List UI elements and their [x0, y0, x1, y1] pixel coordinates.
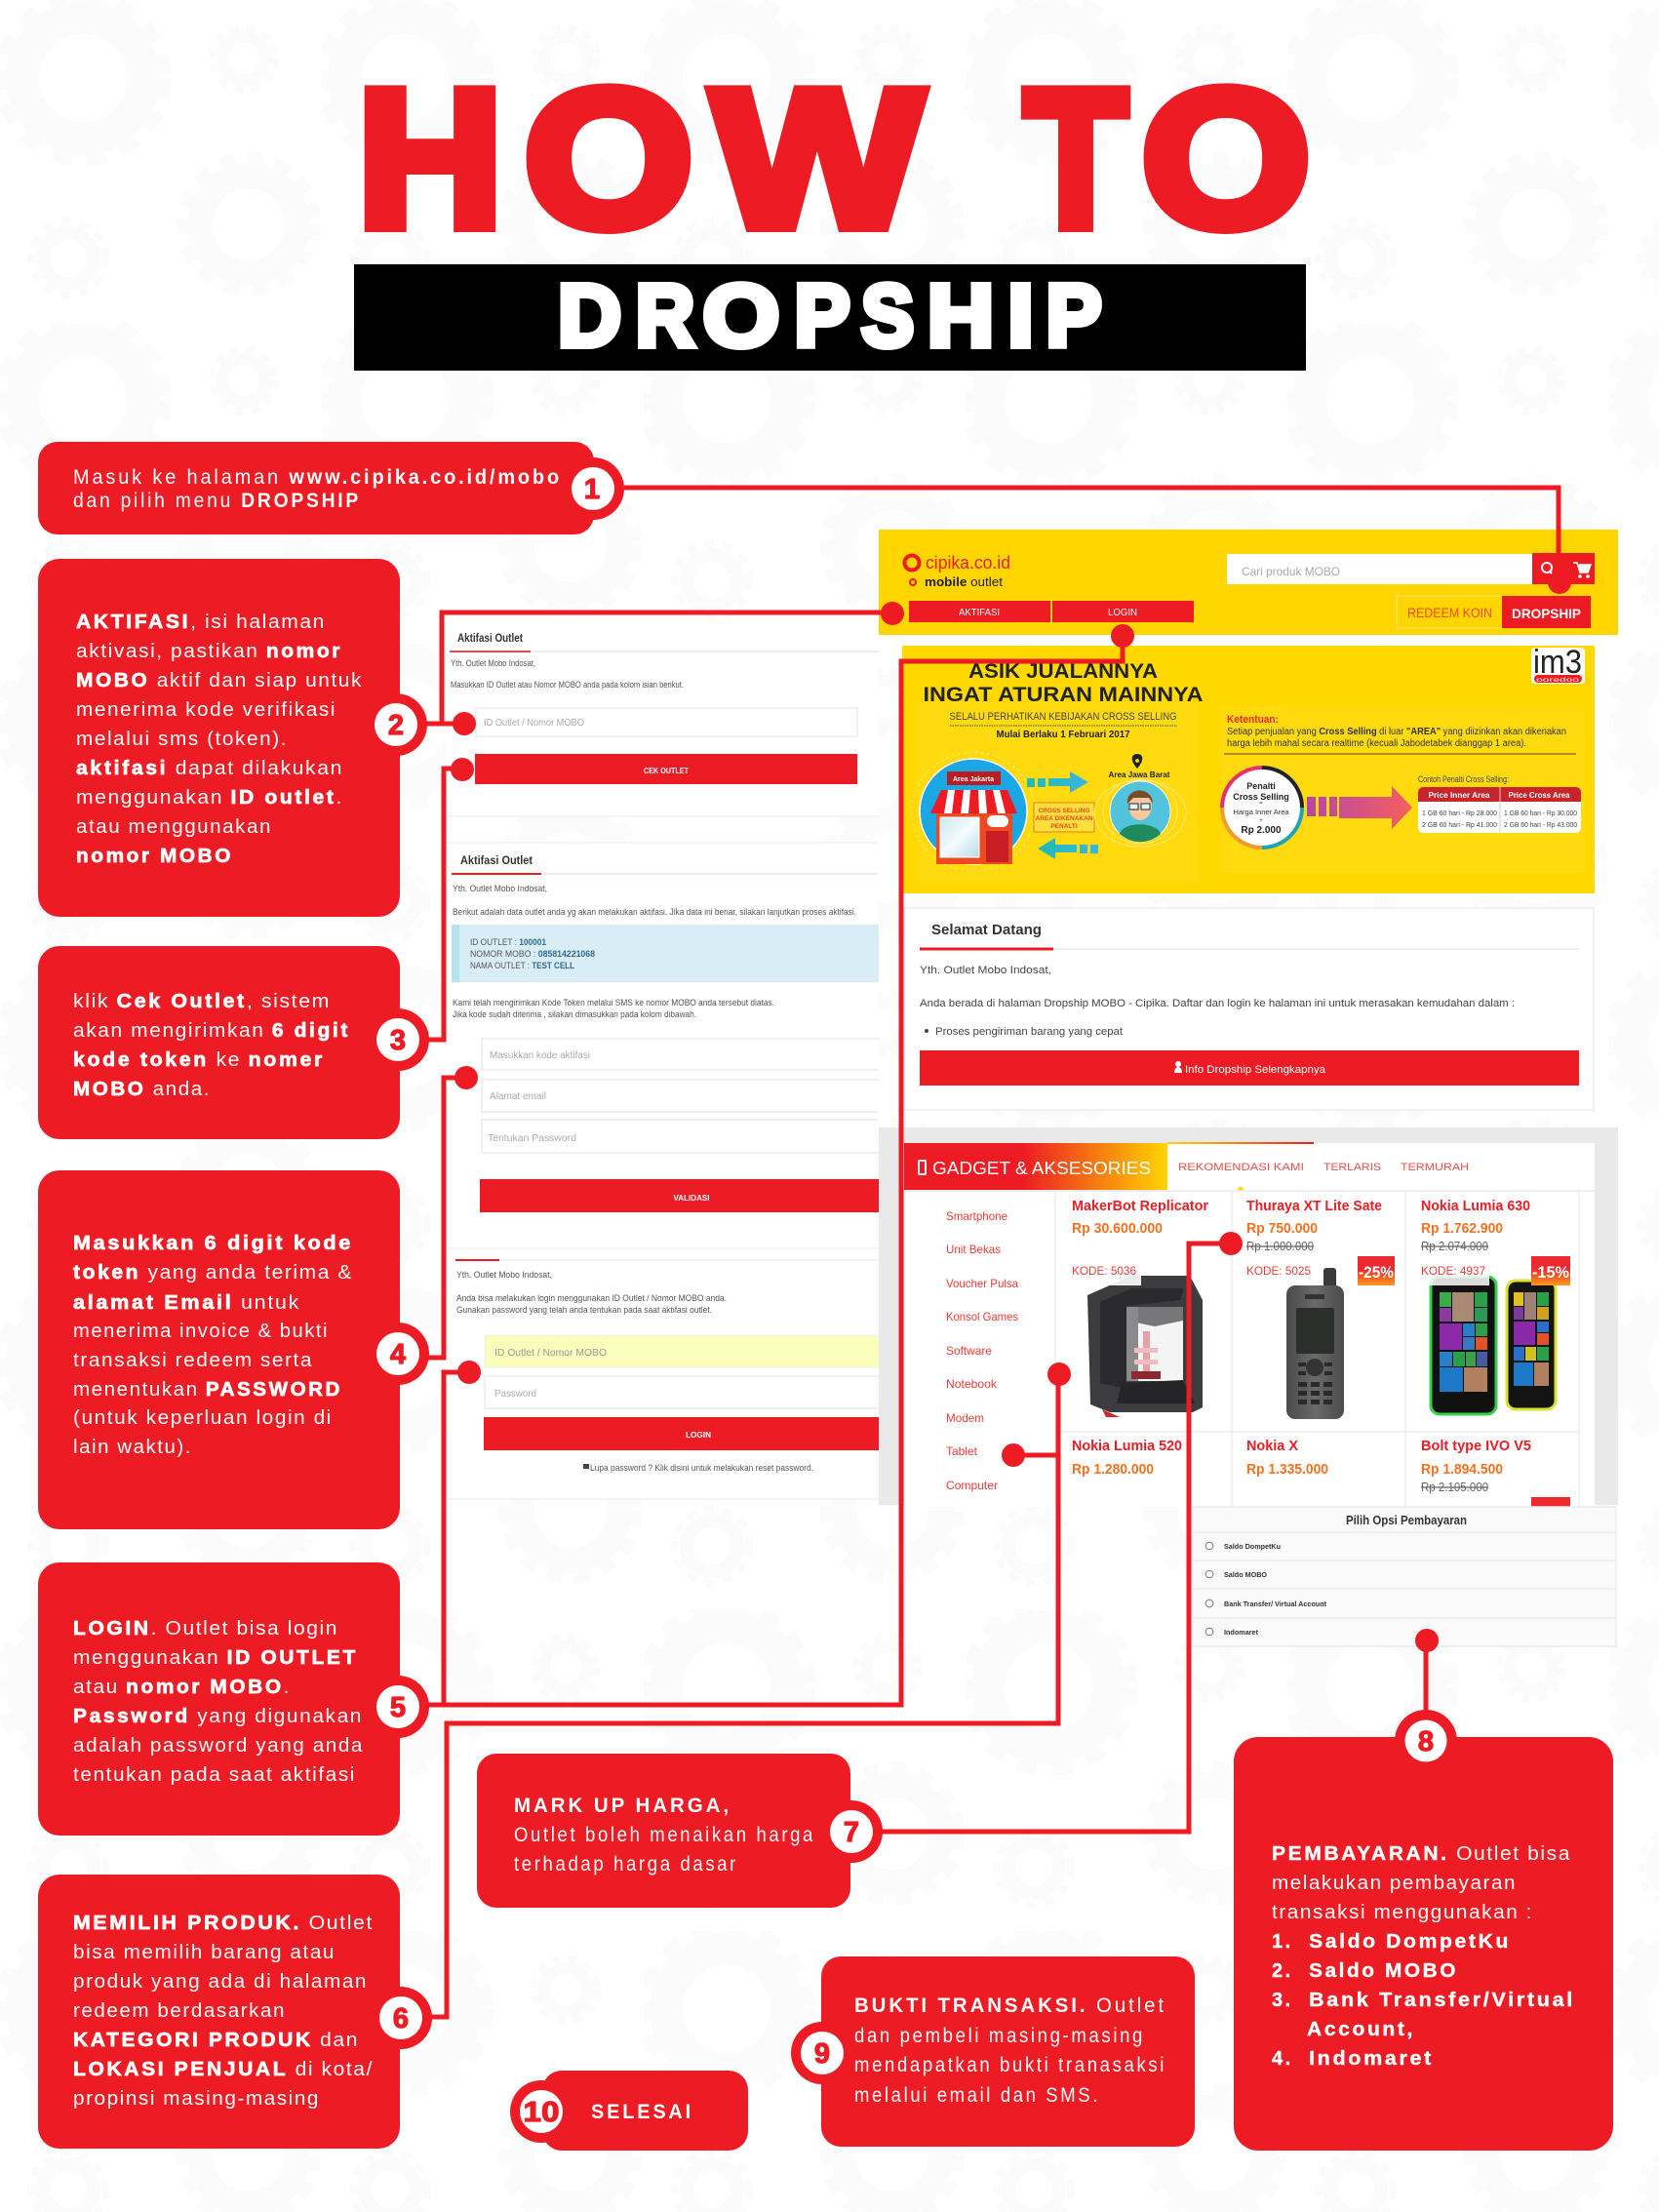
label: cross selling penalty	[1034, 803, 1094, 832]
step 7: mark up price: 7	[844, 1817, 859, 1848]
step 7: mark up price: MARK UP HARGA,	[514, 1795, 731, 1817]
step 8: payment: transaksi menggunakan :	[1272, 1902, 1533, 1923]
step 3: cek outlet: 3	[390, 1025, 406, 1056]
step 6: choose product: bisa memilih barang atau	[73, 1942, 336, 1963]
subtitle banner: DROPSHIP: R	[636, 267, 694, 365]
step 6: choose product	[38, 1875, 432, 2149]
ring: penalti cross selling: Harga Inner Area	[1233, 808, 1289, 816]
menu: product categories: Modem	[946, 1411, 984, 1425]
subtitle banner: DROPSHIP: I	[1007, 266, 1034, 365]
product: nokia x: Nokia X	[1246, 1438, 1298, 1454]
text: ketentuan rules: Ketentuan:	[1227, 714, 1279, 726]
step 8: payment: 3.	[1272, 1990, 1293, 2011]
menu: product categories	[946, 1209, 1018, 1492]
menu: aktifasi and login buttons: AKTIFASI	[959, 608, 1000, 618]
card: token validation form: Jika kode sudah diterima , silakan dimasukkan pada kolom dibawah.	[453, 1009, 696, 1019]
label: cross selling penalty: CROSS SELLING	[1038, 808, 1090, 814]
header: gadget tabs	[904, 1142, 1595, 1191]
title: HOW TO	[358, 49, 1310, 268]
panel: payment options: Saldo MOBO	[1224, 1572, 1268, 1579]
promotional banner: cross selling rules	[902, 644, 1595, 893]
step 8: payment: 1.	[1272, 1931, 1293, 1953]
card: token validation form: VALIDASI	[673, 1193, 710, 1203]
step 2: activation: atau menggunakan	[76, 816, 272, 838]
ring: penalti cross selling: Penalti	[1246, 781, 1276, 791]
header: gadget tabs: GADGET & AKSESORIES	[932, 1159, 1151, 1178]
table: price example: 2 GB 60 hari - Rp 43.000	[1504, 820, 1577, 829]
screenshot: mobile outlet site header	[879, 530, 1618, 635]
product: nokia lumia 520: Rp 1.280.000	[1072, 1461, 1154, 1478]
card: cek outlet form: Masukkan ID Outlet atau Nomor MOBO anda pada kolom isian berikut.	[451, 680, 684, 690]
banner heading: SELALU PERHATIKAN KEBIJAKAN CROSS SELLING	[950, 711, 1176, 723]
step 2: activation: AKTIFASI , isi halaman	[76, 612, 326, 633]
card: login form: Lupa password ? Klik disini untuk melakukan reset password.	[590, 1463, 813, 1473]
banner heading	[923, 660, 1204, 740]
step 1: open site: 1	[584, 474, 600, 505]
step 9: transaction proof: dan pembeli masing-masing	[854, 2025, 1145, 2047]
step 2: activation: menggunakan ID outlet .	[76, 787, 343, 809]
title: HOW TO: T	[1024, 49, 1127, 267]
text: ketentuan rules: Setiap penjualan yang Cross Selling di luar "AREA" yang diizinkan akan dikenakan	[1227, 727, 1566, 737]
header: gadget tabs: TERMURAH	[1401, 1162, 1469, 1173]
step 7: mark up price: terhadap harga dasar	[514, 1853, 738, 1876]
step 9: transaction proof: melalui email dan SMS.	[854, 2084, 1100, 2107]
arrows: cross area flow	[1027, 771, 1098, 859]
card: token validation form: Masukkan kode aktifasi	[490, 1050, 590, 1061]
panel: payment options	[1193, 1507, 1616, 1646]
card: cek outlet form: Aktifasi Outlet	[457, 631, 523, 645]
banner heading: ASIK JUALANNYA	[968, 660, 1158, 683]
card: cek outlet form: CEK OUTLET	[644, 766, 690, 775]
step 4: enter token: menentukan PASSWORD	[73, 1379, 342, 1401]
connector: step 6 to product categories	[429, 1363, 1071, 2017]
menu: product categories: Tablet	[946, 1444, 978, 1458]
step 8: payment: 8	[1418, 1726, 1434, 1758]
menu: product categories: Software	[946, 1344, 992, 1358]
step 4: enter token: (untuk keperluan login di	[73, 1407, 333, 1429]
arrow: to price table	[1307, 786, 1412, 829]
ring: penalti cross selling: =	[1259, 801, 1263, 807]
text: ketentuan rules: harga lebih mahal secara realtime (kecuali Jabodetabek dianggap 1 area).	[1227, 738, 1526, 749]
menu: aktifasi and login buttons	[909, 601, 1194, 622]
logo: im3 ooredoo: ooredoo	[1536, 678, 1580, 684]
title: HOW TO: H	[358, 50, 502, 268]
step 10: finished	[510, 2071, 748, 2151]
subtitle banner: DROPSHIP: H	[928, 266, 994, 365]
card: token validation form: Yth. Outlet Mobo Indosat,	[453, 884, 547, 893]
card: token validation form	[452, 853, 879, 1212]
panel: payment options: Pilih Opsi Pembayaran	[1346, 1514, 1467, 1527]
card: token validation form: Alamat email	[490, 1091, 546, 1102]
step 5: login: 5	[390, 1692, 406, 1723]
step 7: mark up price: Outlet boleh menaikan harga	[514, 1824, 815, 1846]
product: thuraya xt lite: KODE: 5025	[1246, 1264, 1311, 1278]
card: cek outlet form: Yth. Outlet Mobo Indosat,	[451, 658, 535, 668]
product: nokia x	[1246, 1438, 1328, 1478]
product: thuraya xt lite: Thuraya XT Lite Sate	[1246, 1198, 1382, 1214]
step 4: enter token: lain waktu).	[73, 1437, 192, 1458]
step 5: login: adalah password yang anda	[73, 1735, 364, 1757]
step 5: login: LOGIN. Outlet bisa login	[73, 1618, 338, 1639]
step 5: login: menggunakan ID OUTLET	[73, 1647, 358, 1669]
card: cek outlet form	[450, 631, 879, 784]
table: price example: 2 GB 60 hari - Rp 41.000	[1422, 820, 1497, 829]
step 1: open site: Masuk ke halaman www.cipika.co.id/mobo	[73, 466, 562, 489]
step 6: choose product: produk yang ada di halaman	[73, 1971, 368, 1993]
subtitle banner: DROPSHIP: D	[558, 267, 621, 365]
menu: redeem koin and dropship	[1397, 596, 1591, 628]
connector: step 8 to payment	[1415, 1629, 1439, 1726]
step 2: activation: melalui sms (token).	[76, 729, 288, 750]
menu: product categories: Smartphone	[946, 1209, 1007, 1223]
step 9: transaction proof	[791, 1956, 1195, 2147]
table: price example	[1418, 774, 1581, 833]
product: bolt type ivo v5	[1421, 1438, 1570, 1507]
card: login form: Yth. Outlet Mobo Indosat,	[456, 1270, 552, 1280]
title: HOW TO: O	[1142, 50, 1310, 267]
step 4: enter token: 4	[390, 1339, 406, 1370]
card: token validation form: NOMOR MOBO : 085814221068	[470, 949, 595, 959]
card: token validation form: Aktifasi Outlet	[460, 853, 533, 867]
panel: payment options: Bank Transfer/ Virtual Account	[1224, 1601, 1327, 1608]
product: nokia lumia 520	[1072, 1438, 1182, 1478]
logo: im3 ooredoo: im3	[1533, 644, 1582, 681]
step 6: choose product: propinsi masing-masing	[73, 2088, 320, 2110]
search box: Cari produk MOBO	[1242, 565, 1340, 578]
panel: selamat datang welcome card	[904, 908, 1594, 1110]
step 8: payment: Saldo DompetKu	[1309, 1931, 1511, 1953]
card: token validation form: ID OUTLET : 100001	[470, 937, 546, 947]
product: thuraya xt lite: -25%	[1359, 1263, 1394, 1282]
step 2: activation: MOBO aktif dan siap untuk	[76, 670, 363, 691]
ring: penalti cross selling: Cross Selling	[1233, 792, 1289, 802]
card: login form: Anda bisa melakukan login menggunakan ID Outlet / Nomor MOBO anda.	[456, 1293, 727, 1303]
product: nokia lumia 630	[1416, 1198, 1570, 1414]
ring: penalti cross selling: +	[1259, 818, 1263, 824]
banner heading: INGAT ATURAN MAINNYA	[923, 684, 1204, 706]
step 4: enter token: transaksi redeem serta	[73, 1350, 313, 1371]
step 1: open site	[38, 442, 624, 534]
step 3: cek outlet: MOBO anda.	[73, 1079, 211, 1100]
step 9: transaction proof: mendapatkan bukti tranasaksi	[854, 2054, 1166, 2076]
menu: product categories: Voucher Pulsa	[946, 1277, 1018, 1290]
step 5: login: atau nomor MOBO .	[73, 1677, 291, 1698]
product: nokia lumia 630: Nokia Lumia 630	[1421, 1198, 1530, 1214]
card: token validation form: NAMA OUTLET : TEST CELL	[470, 961, 574, 970]
logo: cipika mobile outlet: cipika.co.id	[926, 553, 1010, 573]
product: nokia lumia 630: Rp 1.762.900	[1421, 1220, 1503, 1237]
step 8: payment: Bank Transfer/Virtual	[1309, 1990, 1575, 2011]
step 8: payment: melakukan pembayaran	[1272, 1873, 1517, 1894]
card: token validation form: Kami telah mengirimkan Kode Token melalui SMS ke nomor MOBO anda tersebut diatas.	[453, 998, 774, 1007]
step 6: choose product: redeem berdasarkan	[73, 2000, 286, 2022]
step 6: choose product: LOKASI PENJUAL di kota/	[73, 2059, 374, 2080]
text: ketentuan rules	[1224, 714, 1576, 754]
panel: selamat datang welcome card: Anda berada di halaman Dropship MOBO - Cipika. Daftar dan login ke halaman ini untuk merasakan kemudahan dalam :	[920, 998, 1515, 1009]
step 2: activation: aktivasi, pastikan nomor	[76, 641, 342, 662]
step 5: login: tentukan pada saat aktifasi	[73, 1764, 356, 1786]
header: gadget tabs: TERLARIS	[1323, 1162, 1381, 1173]
menu: aktifasi and login buttons: LOGIN	[1108, 608, 1137, 618]
step 5: login	[38, 1562, 429, 1836]
card: login form: Password	[494, 1389, 536, 1400]
header: gadget tabs: REKOMENDASI KAMI	[1178, 1162, 1304, 1173]
illustration: customer in west java: Area Jawa Barat	[1108, 770, 1170, 779]
step 10: finished: 10	[523, 2097, 560, 2128]
menu: redeem koin and dropship: REDEEM KOIN	[1407, 605, 1492, 620]
step 8: payment: PEMBAYARAN. Outlet bisa	[1272, 1843, 1571, 1865]
step 7: mark up price	[477, 1754, 883, 1908]
product: makerbot replicator: KODE: 5036	[1072, 1264, 1136, 1278]
product: bolt type ivo v5: Rp 1.894.500	[1421, 1461, 1503, 1478]
subtitle banner: DROPSHIP: P	[1046, 267, 1102, 365]
product: nokia x: Rp 1.335.000	[1246, 1461, 1328, 1478]
panel: selamat datang welcome card: Selamat Datang	[931, 922, 1042, 938]
connector lines and target dots	[426, 488, 1571, 2017]
illustration: shop	[912, 752, 1035, 871]
title: HOW TO: O	[525, 50, 692, 267]
step 3: cek outlet: akan mengirimkan 6 digit	[73, 1020, 350, 1042]
step 3: cek outlet	[38, 946, 429, 1139]
menu: redeem koin and dropship: DROPSHIP	[1512, 606, 1581, 621]
connector: step 2 to activation	[426, 602, 904, 735]
step 1: open site: dan pilih menu DROPSHIP	[73, 490, 361, 512]
menu: product categories: Konsol Games	[946, 1310, 1018, 1323]
product: nokia lumia 630: -15%	[1532, 1263, 1569, 1282]
step 5: login: Password yang digunakan	[73, 1706, 363, 1727]
step 4: enter token: Masukkan 6 digit kode	[73, 1233, 353, 1254]
ring: penalti cross selling	[1222, 768, 1302, 848]
step 6: choose product: KATEGORI PRODUK dan	[73, 2030, 359, 2051]
step 8: payment	[1234, 1710, 1613, 2151]
connector: step 4 to token form	[426, 1066, 478, 1358]
illustration: shop: Area Jakarta	[953, 776, 994, 783]
title: HOW TO: W	[712, 51, 923, 267]
subtitle banner: DROPSHIP: P	[794, 267, 850, 365]
panel: gadget and accessories products	[879, 1127, 1618, 1507]
table: price example: Price Cross Area	[1508, 790, 1570, 800]
banner heading: Mulai Berlaku 1 Februari 2017	[997, 730, 1130, 740]
screenshot: activation and login pages	[446, 624, 879, 1499]
menu: product categories: Notebook	[946, 1377, 998, 1391]
product: thuraya xt lite: Rp 750.000	[1246, 1220, 1318, 1237]
subtitle banner: DROPSHIP	[354, 264, 1306, 371]
step 4: enter token: token yang anda terima &	[73, 1262, 353, 1284]
step 4: enter token: menerima invoice & bukti	[73, 1321, 329, 1342]
connector: step 7 to price	[878, 1232, 1243, 1832]
table: price example: Contoh Penalti Cross Selling:	[1418, 774, 1509, 784]
step 2: activation: 2	[388, 710, 404, 741]
card: cek outlet form: ID Outlet / Nomor MOBO	[484, 718, 584, 729]
panel: selamat datang welcome card: Info Dropship Selengkapnya	[1185, 1064, 1326, 1076]
step 4: enter token	[38, 1170, 429, 1529]
connector: step 3 to cek outlet	[426, 758, 474, 1040]
product: nokia lumia 630: KODE: 4937	[1421, 1264, 1485, 1278]
subtitle banner: DROPSHIP: O	[703, 267, 779, 365]
table: price example: 1 GB 60 hari - Rp 30.000	[1504, 809, 1577, 817]
step 2: activation: menerima kode verifikasi	[76, 699, 336, 721]
card: login form: Gunakan password yang telah anda tentukan pada saat aktifasi outlet.	[456, 1305, 712, 1315]
step 8: payment: Account,	[1307, 2019, 1415, 2040]
panel: payment options: Indomaret	[1224, 1630, 1259, 1637]
product: bolt type ivo v5: Bolt type IVO V5	[1421, 1438, 1531, 1454]
table: price example: 1 GB 60 hari - Rp 28.000	[1422, 809, 1497, 817]
menu: product categories: Computer	[946, 1479, 998, 1492]
product: makerbot replicator: Rp 30.600.000	[1072, 1220, 1163, 1237]
step 8: payment: 2.	[1272, 1960, 1293, 1982]
card: login form	[455, 1260, 879, 1473]
step 3: cek outlet: kode token ke nomer	[73, 1049, 325, 1071]
step 10: finished: SELESAI	[591, 2101, 693, 2123]
product: thuraya xt lite: Rp 1.000.000	[1246, 1239, 1314, 1253]
step 2: activation: aktifasi dapat dilakukan	[76, 758, 343, 779]
panel: selamat datang welcome card: Yth. Outlet Mobo Indosat,	[920, 965, 1051, 976]
logo: cipika mobile outlet: mobile outlet	[925, 574, 1003, 589]
subtitle banner: DROPSHIP: S	[861, 267, 914, 365]
logo: cipika mobile outlet	[905, 553, 1010, 589]
step 2: activation: nomor MOBO	[76, 846, 233, 867]
step 3: cek outlet: klik Cek Outlet , sistem	[73, 991, 331, 1012]
label: cross selling penalty: AREA DIKENAKAN	[1036, 815, 1093, 822]
step 6: choose product: MEMILIH PRODUK. Outlet	[73, 1913, 374, 1934]
step 4: enter token: alamat Email untuk	[73, 1292, 300, 1314]
illustration: customer in west java	[1094, 754, 1186, 847]
step 8: payment: 4.	[1272, 2048, 1293, 2070]
menu: product categories: Unit Bekas	[946, 1243, 1001, 1256]
panel: selamat datang welcome card: Proses pengiriman barang yang cepat	[935, 1026, 1123, 1038]
step 8: payment: Saldo MOBO	[1309, 1960, 1458, 1982]
ring: penalti cross selling: Rp 2.000	[1241, 825, 1282, 836]
connector: step 1 to dropship menu	[624, 488, 1571, 594]
table: price example: Price Inner Area	[1428, 790, 1490, 800]
connector: step 5 to login	[426, 624, 1134, 1705]
search box	[1227, 553, 1595, 584]
step 2: activation	[38, 559, 427, 917]
card: login form: ID Outlet / Nomor MOBO	[494, 1348, 607, 1359]
product: nokia lumia 630: Rp 2.074.000	[1421, 1239, 1488, 1253]
card: token validation form: Berikut adalah data outlet anda yg akan melakukan aktifasi. Jika data ini benar, silakan lanjutkan proses aktifasi.	[453, 907, 856, 917]
card: login form: LOGIN	[686, 1430, 711, 1440]
product: makerbot replicator	[1066, 1198, 1208, 1417]
product: bolt type ivo v5: Rp 2.105.000	[1421, 1480, 1488, 1494]
step 9: transaction proof: 9	[814, 2038, 830, 2070]
panel: payment options: Saldo DompetKu	[1224, 1544, 1281, 1551]
step 8: payment: Indomaret	[1309, 2048, 1434, 2070]
label: cross selling penalty: PENALTI	[1050, 823, 1078, 830]
product: thuraya xt lite	[1242, 1198, 1395, 1419]
product: nokia lumia 520: Nokia Lumia 520	[1072, 1438, 1182, 1454]
product: makerbot replicator: MakerBot Replicator	[1072, 1198, 1208, 1214]
step 6: choose product: 6	[393, 2003, 409, 2034]
card: token validation form: Tentukan Password	[488, 1133, 576, 1144]
step 9: transaction proof: BUKTI TRANSAKSI. Outlet	[854, 1995, 1166, 2017]
